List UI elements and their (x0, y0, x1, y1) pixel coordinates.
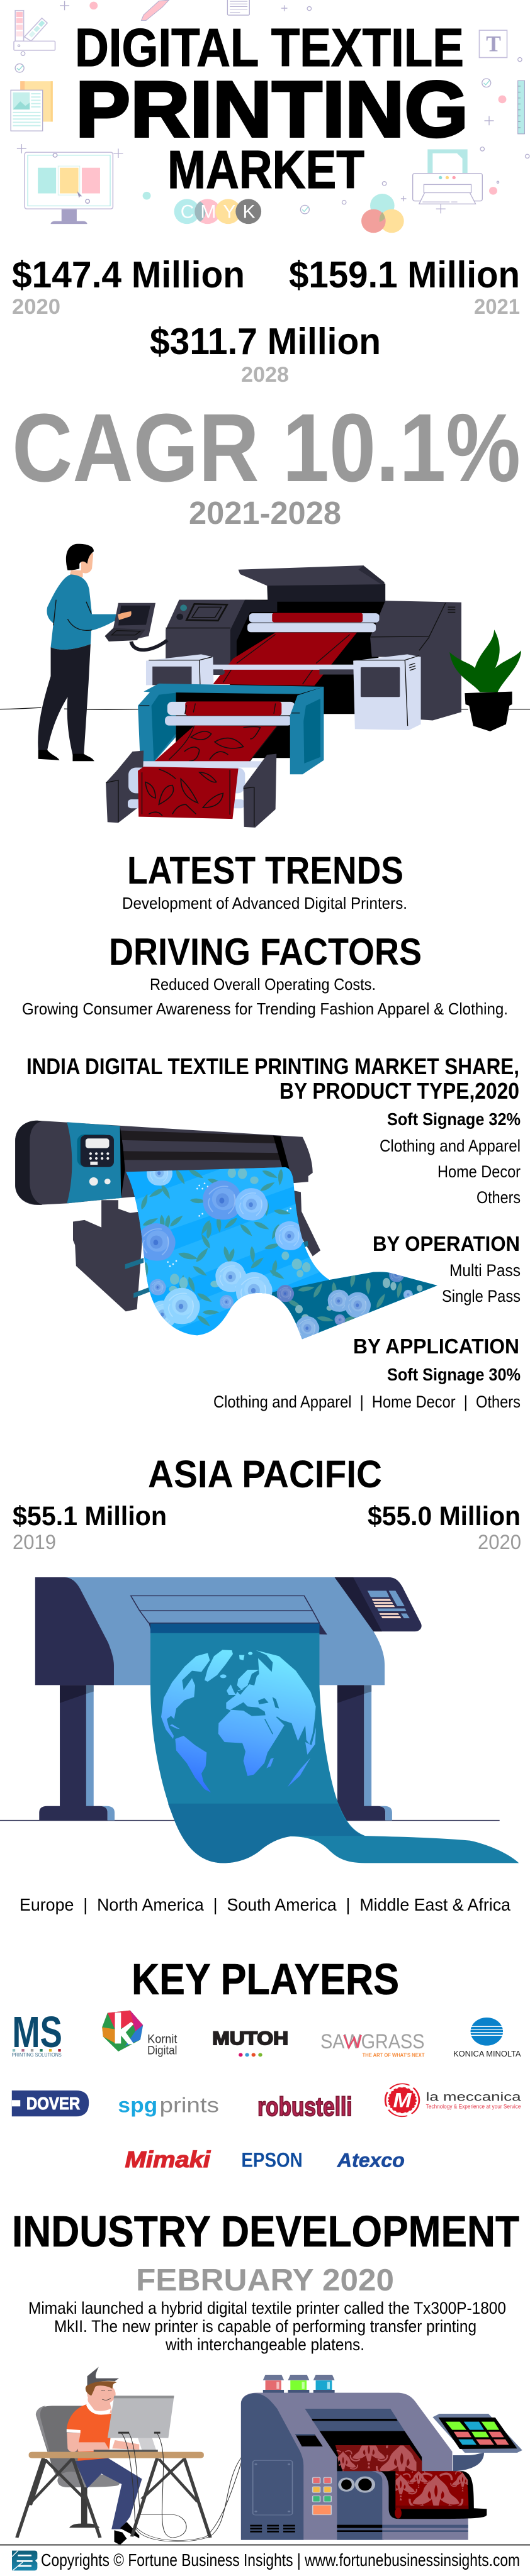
figure: 2019 value (13, 1501, 167, 1553)
damask fabric pattern (336, 2445, 468, 2506)
illustration: wide format printer with floral fabric (15, 1121, 447, 1352)
list: by application (213, 1335, 521, 1411)
figure: 2021 value: $159.1 Million (289, 254, 520, 296)
logo: Kornit Digital (102, 2011, 178, 2057)
section: industry development (12, 2207, 522, 2545)
plotter body (35, 1577, 385, 1685)
connecting cables (121, 2433, 242, 2541)
section: latest trends (122, 849, 407, 913)
figure: 2028 value: 2028 (241, 363, 289, 387)
illustration: plotter printing globe (0, 1577, 519, 1863)
icon: document (227, 0, 249, 15)
logo: MS Printing Solutions: PRINTING SOLUTIONS (12, 2052, 62, 2058)
section: driving factors: Reduced Overall Operating Costs. (150, 975, 376, 994)
list: by operation (373, 1232, 521, 1306)
icon: CMYK circles: M (200, 202, 216, 223)
control panel (335, 1577, 422, 1631)
market size figures (12, 254, 520, 387)
list: product types (380, 1109, 521, 1207)
logo: Dover: DOVER (26, 2094, 80, 2113)
icon: small plus and dot markers (15, 1, 529, 214)
designer (67, 2367, 142, 2545)
icon: colour venn circles (361, 194, 404, 233)
globe continents (161, 1650, 316, 1792)
section: India market share (15, 1053, 521, 1411)
figure: 2020 value (12, 254, 245, 319)
operator (38, 544, 118, 761)
logo: Mutoh (212, 2028, 288, 2057)
touch screen panel (432, 2414, 522, 2471)
icon: CMYK circles (174, 199, 261, 224)
section: latest trends: Development of Advanced Digital Printers. (122, 894, 407, 913)
footer (0, 2545, 530, 2570)
logo grid: MS (12, 2007, 62, 2057)
logo: Atexco: Atexco (337, 2149, 405, 2171)
logo: La Meccanica: M (393, 2089, 412, 2112)
floral fabric (126, 1167, 437, 1340)
logo: Dover (12, 2090, 89, 2116)
logo: Kornit Digital: Digital (147, 2044, 177, 2057)
ink bottles (263, 2375, 335, 2393)
section: driving factors (22, 931, 508, 1018)
figure: 2021 value: 2021 (474, 295, 520, 319)
description: MkII. The new printer is capable of performing transfer printing (54, 2317, 476, 2336)
logo: Mutoh: MUTOH (212, 2028, 288, 2049)
description: with interchangeable platens. (165, 2335, 364, 2354)
take-up roller with printed cloth (106, 750, 276, 828)
list: by operation: BY OPERATION (373, 1232, 520, 1255)
title (75, 18, 468, 200)
figure: 2020 value: 2020 (478, 1531, 521, 1553)
front teal printer unit (138, 684, 324, 774)
section: latest trends: LATEST TRENDS (127, 849, 403, 892)
computer monitor (94, 2396, 174, 2452)
list: product types: Others (476, 1188, 521, 1207)
laptop (104, 603, 167, 650)
fabric roll (380, 2471, 487, 2519)
desk (17, 2452, 210, 2538)
heading (26, 1053, 519, 1104)
figure: 2020 value (368, 1501, 521, 1553)
list: by operation: Single Pass (442, 1287, 521, 1306)
title: DIGITAL TEXTILE (75, 18, 464, 78)
figure: 2020 value: $147.4 Million (12, 254, 245, 296)
illustration: operator at textile printer (0, 544, 530, 828)
figure: 2019 value: $55.1 Million (13, 1501, 167, 1531)
list: other regions: Europe | North America | South America | Middle East & Africa (20, 1895, 510, 1914)
logo: La Meccanica (385, 2084, 521, 2116)
figure: 2020 value: 2020 (12, 295, 60, 319)
figure: 2020 value: $55.0 Million (368, 1501, 521, 1531)
title: MARKET (167, 140, 364, 200)
icon: ink dropper (141, 0, 169, 20)
printed fabric (150, 1624, 519, 1863)
logo: spgprints: spg (118, 2094, 157, 2117)
back printer (166, 565, 461, 721)
logo: MS Printing Solutions (12, 2007, 62, 2058)
logo: Konica Minolta (453, 2018, 521, 2058)
icon: colour swatch book (14, 11, 55, 50)
icon: CMYK circles: C (181, 202, 194, 223)
section: key players (12, 1955, 521, 2172)
section: Asia Pacific (0, 1453, 521, 1914)
icon: CMYK circles: Y (223, 202, 236, 223)
logo: Sawgrass: SAWGRASS (320, 2030, 424, 2053)
figure: 2019 value: 2019 (13, 1531, 56, 1553)
description (28, 2299, 506, 2354)
icon: letter T box (479, 30, 507, 58)
logo: Sawgrass (320, 2030, 425, 2058)
CAGR callout: 2021-2028 (189, 495, 341, 531)
figure: 2028 value: $311.7 Million (150, 321, 381, 362)
chair (36, 2406, 120, 2528)
header decorative icons (11, 0, 529, 233)
list: by application: Soft Signage 30% (387, 1365, 521, 1384)
icon: monitor with colour panels (25, 152, 113, 224)
icon: ruler (518, 80, 524, 134)
title: PRINTING (76, 65, 468, 153)
textile printer body (241, 2393, 468, 2540)
heading: KEY PLAYERS (132, 1955, 399, 2004)
plotter legs (39, 1685, 392, 1821)
icon: layout papers (11, 81, 53, 131)
logo: Epson: EPSON (241, 2149, 303, 2172)
figure: 2028 value (150, 321, 381, 387)
figure: 2021 value (289, 254, 520, 319)
section: driving factors: DRIVING FACTORS (109, 931, 422, 973)
logo: Mimaki: Mimaki (125, 2147, 211, 2172)
printer head (15, 1121, 313, 1205)
list: by application: BY APPLICATION (353, 1335, 519, 1358)
illustration: designer at computer with textile printer (17, 2367, 522, 2545)
icon: CMYK circles: K (243, 202, 256, 223)
logo: spgprints (118, 2094, 219, 2117)
printer stand (73, 1191, 320, 1311)
logo: spgprints: prints (159, 2094, 219, 2117)
logo: Sawgrass: THE ART OF WHAT'S NEXT (363, 2053, 425, 2058)
heading: ASIA PACIFIC (148, 1453, 382, 1496)
logo grid (12, 2007, 521, 2172)
list: product types: Soft Signage 32% (387, 1109, 521, 1129)
icon: Fortune Business Insights logo (12, 2551, 37, 2570)
list: by operation: Multi Pass (449, 1261, 521, 1280)
date: FEBRUARY 2020 (136, 2263, 394, 2297)
icon: desktop printer (413, 149, 482, 204)
logo grid: robustelli (257, 2092, 352, 2121)
icon: letter T box: T (486, 31, 501, 56)
side cabinets (146, 654, 421, 730)
logo: Kornit Digital: Kornit (147, 2033, 178, 2046)
plant (449, 630, 521, 731)
